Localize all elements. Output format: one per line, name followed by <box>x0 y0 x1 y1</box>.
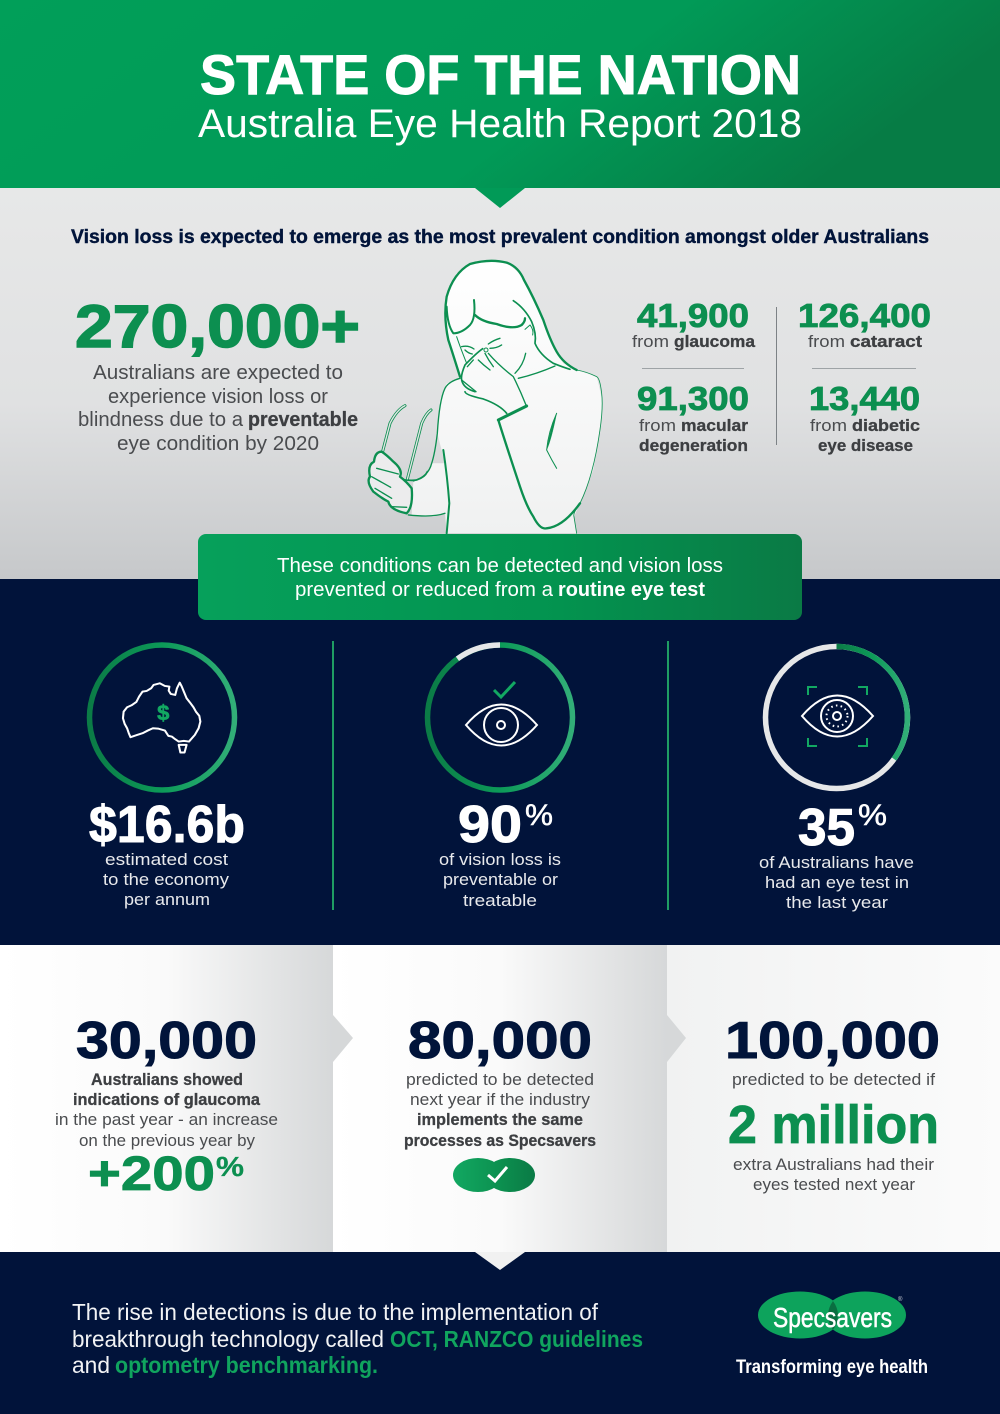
footer text <box>72 1299 643 1378</box>
diabetic eye disease: 13,440 <box>809 380 920 417</box>
logo: Specsavers: ® <box>898 1296 903 1303</box>
callout: routine eye test: routine eye test <box>558 579 705 601</box>
heading: vision loss: Vision loss is expected to emerge as the most prevalent condition amongst older Australians <box>71 226 929 248</box>
footer text: breakthrough technology called <box>72 1326 384 1352</box>
stat: 270,000+: eye condition by 2020 <box>117 432 319 455</box>
stat: 35% tested: of Australians have <box>759 853 914 872</box>
header banner <box>0 0 1000 208</box>
icon: Australia map with dollar sign: $ <box>157 700 169 725</box>
callout: routine eye test: These conditions can be detected and vision loss <box>277 555 723 577</box>
conditions breakdown <box>632 297 931 455</box>
left hand <box>369 452 412 513</box>
panel: 100,000 <box>667 945 1000 1252</box>
title: STATE OF THE NATION <box>200 43 801 106</box>
panel: 80,000: processes as Specsavers <box>404 1131 596 1150</box>
stat: cost to economy <box>89 645 245 909</box>
panel: 30,000: indications of glaucoma <box>73 1090 261 1109</box>
panel: 80,000: next year if the industry <box>410 1090 590 1109</box>
panel: 30,000 <box>0 945 333 1252</box>
glaucoma: glaucoma <box>674 332 756 351</box>
panel: navy stats <box>0 579 1000 945</box>
footer text: The rise in detections is due to the implementation of <box>72 1299 599 1325</box>
glaucoma: from <box>632 332 669 351</box>
stat: 35% tested: 35 <box>798 799 855 857</box>
stat: 35% tested: had an eye test in <box>765 873 909 892</box>
stat: cost to economy: to the economy <box>103 870 230 889</box>
arrow: panel 2 to 3 <box>667 1015 686 1062</box>
stat: 270,000+: preventable <box>248 408 358 431</box>
panel: 100,000: predicted to be detected if <box>732 1070 935 1089</box>
stat: 90% preventable: 90 <box>458 796 522 854</box>
glaucoma <box>632 297 756 351</box>
stat: 270,000+: Australians are expected to <box>93 361 343 384</box>
panel: 30,000: on the previous year by <box>79 1131 255 1150</box>
panel: 100,000: eyes tested next year <box>753 1175 915 1194</box>
sleeve cuff <box>498 406 527 420</box>
callout: routine eye test: prevented or reduced from a <box>295 579 554 601</box>
stat: 90% preventable: of vision loss is <box>439 850 561 869</box>
panel: 100,000: 2 million <box>728 1095 939 1155</box>
panel: 30,000: 30,000 <box>76 1012 257 1070</box>
glaucoma: 41,900 <box>637 297 749 334</box>
background: grey section <box>0 188 1000 579</box>
panel: 80,000 <box>333 945 667 1252</box>
panel: 30,000: Australians showed <box>91 1070 243 1089</box>
diabetic eye disease: from <box>810 416 847 435</box>
cataract: cataract <box>850 332 922 351</box>
stat: 270,000+: 270,000+ <box>75 293 360 360</box>
stat: cost to economy: estimated cost <box>105 850 228 869</box>
callout: routine eye test <box>198 534 802 620</box>
panel: 100,000: 100,000 <box>725 1012 940 1070</box>
stat: 35% tested <box>759 646 914 912</box>
footer text: OCT, RANZCO guidelines <box>390 1326 643 1352</box>
diabetic eye disease <box>809 380 920 455</box>
face <box>457 337 467 363</box>
stat: cost to economy: per annum <box>124 890 210 909</box>
stat: 90% preventable: % <box>525 799 553 832</box>
panel: 100,000: extra Australians had their <box>733 1155 934 1174</box>
icon: eye scan <box>802 687 873 746</box>
macular degeneration: macular <box>681 416 748 435</box>
subtitle: Australia Eye Health Report 2018 <box>198 102 802 146</box>
icon: overlapping ovals with check <box>453 1158 535 1192</box>
logo: Specsavers <box>736 1292 928 1378</box>
sleeve <box>498 420 580 528</box>
footer text: optometry benchmarking. <box>115 1352 378 1378</box>
right hand <box>461 349 507 413</box>
stat: cost to economy: $16.6b <box>89 796 245 854</box>
macular degeneration: 91,300 <box>637 380 749 417</box>
diabetic eye disease: diabetic <box>852 416 920 435</box>
stat: 35% tested: the last year <box>786 893 888 912</box>
panel: footer <box>0 1252 1000 1414</box>
glasses <box>382 406 405 453</box>
panel: 30,000: +200 <box>88 1148 215 1201</box>
torso and left arm <box>413 378 460 481</box>
footer text: and <box>72 1352 110 1378</box>
stat: 270,000+ <box>75 293 360 455</box>
cataract <box>798 297 931 351</box>
logo: Specsavers: Specsavers <box>773 1302 892 1333</box>
arrow: panel 1 to 2 <box>333 1015 353 1062</box>
cataract: 126,400 <box>798 297 931 334</box>
stat: 270,000+: experience vision loss or <box>108 385 328 408</box>
stat: 270,000+: blindness due to a <box>78 408 244 431</box>
macular degeneration <box>637 380 749 455</box>
stat: 90% preventable: preventable or <box>443 870 558 889</box>
logo: Specsavers: Transforming eye health <box>736 1357 928 1378</box>
stat: 35% tested: % <box>858 799 887 832</box>
icon: Australia map with dollar sign <box>123 683 200 753</box>
panel: 30,000: in the past year - an increase <box>55 1110 278 1129</box>
cataract: from <box>808 332 845 351</box>
illustration: woman pinching nose holding glasses <box>369 261 602 533</box>
macular degeneration: degeneration <box>639 436 748 455</box>
panel: 80,000: implements the same <box>417 1110 583 1129</box>
panel: 80,000: 80,000 <box>408 1012 592 1070</box>
diabetic eye disease: eye disease <box>818 436 913 455</box>
panel: 30,000: % <box>216 1151 244 1182</box>
macular degeneration: from <box>639 416 676 435</box>
stat: 90% preventable: treatable <box>463 891 537 910</box>
icon: eye with check <box>466 682 537 746</box>
hair outline <box>445 261 577 377</box>
stat: 90% preventable <box>428 645 572 910</box>
panel: 80,000: predicted to be detected <box>406 1070 594 1089</box>
